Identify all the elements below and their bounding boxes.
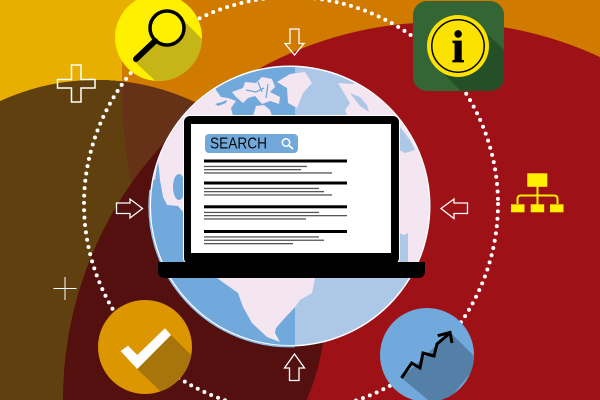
sea: arctic channels	[246, 82, 268, 98]
sea: west lake	[173, 174, 183, 200]
search bar	[205, 134, 298, 153]
icon: check mark badge	[98, 300, 192, 394]
sea: inlet	[350, 93, 369, 112]
icon: site map hierarchy	[511, 173, 564, 212]
icon: magnifier badge	[115, 0, 202, 81]
land: greenland	[277, 72, 312, 108]
dotted orbit ring	[84, 0, 498, 400]
globe	[148, 66, 430, 348]
sea: lower right patch	[399, 233, 408, 262]
arrow: pointing up	[284, 354, 304, 380]
land: north-east mass	[338, 83, 429, 262]
sea: right patch	[400, 128, 415, 153]
laptop base	[158, 262, 425, 278]
land: small island and bay	[253, 105, 272, 116]
land: south america	[217, 278, 315, 342]
sea: small strait	[215, 100, 227, 106]
arrow: pointing right	[116, 199, 142, 218]
icon: information badge: i	[452, 22, 464, 72]
icon: information badge	[413, 1, 504, 91]
laptop lid	[183, 115, 400, 265]
icon: thin plus	[54, 277, 76, 300]
icon: growth chart badge	[380, 308, 480, 400]
search bar: SEARCH	[210, 136, 267, 152]
arrow: pointing left	[441, 199, 468, 218]
icon: outlined plus	[58, 65, 95, 102]
land: arctic islands	[232, 77, 280, 104]
laptop	[158, 115, 425, 278]
arrow: pointing down	[285, 29, 304, 55]
land: americas north-west	[154, 88, 236, 212]
laptop screen	[191, 124, 391, 253]
search results	[204, 160, 347, 244]
